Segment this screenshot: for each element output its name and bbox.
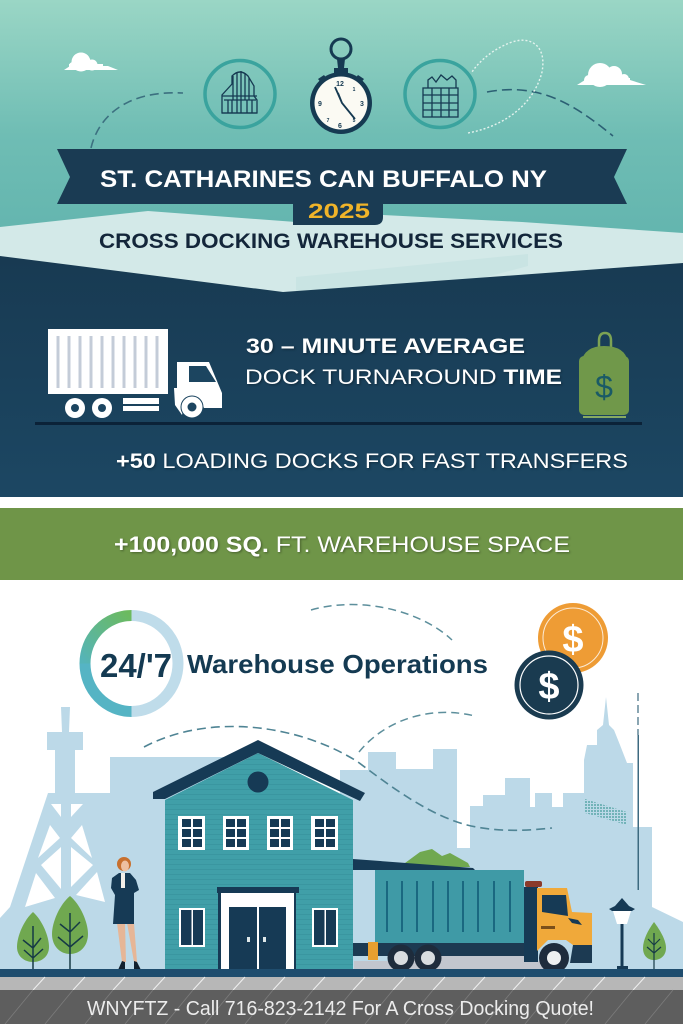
watch numerals: 9 [318, 101, 322, 108]
warehouse building [153, 740, 365, 973]
safety light [368, 942, 378, 960]
pole line [638, 735, 639, 890]
dashed route short [359, 712, 475, 752]
watch numerals: 3 [360, 101, 364, 108]
ribbon banner [57, 149, 627, 204]
roof [153, 740, 365, 801]
tree left large [52, 896, 88, 969]
head and hair [117, 857, 131, 871]
heading: warehouse operations: Warehouse Operations [187, 649, 488, 679]
watch numerals: 6 [338, 123, 342, 130]
dump truck [353, 849, 592, 973]
heading: 24/7: 24/'7 [100, 647, 172, 684]
footer bar [0, 990, 683, 1024]
stopwatch ring [331, 39, 351, 59]
cargo box [375, 870, 524, 943]
icon: warehouse building in ring [205, 60, 275, 128]
crown [334, 59, 348, 73]
wheels [388, 944, 414, 972]
right buildings [340, 697, 683, 970]
green load [405, 849, 470, 867]
entrance door [217, 887, 299, 973]
banner title: ST. CATHARINES CAN BUFFALO NY [100, 166, 547, 193]
upper windows [178, 816, 338, 850]
dashed route right [487, 90, 613, 136]
jacket and skirt [111, 873, 139, 924]
lower windows [179, 908, 338, 947]
round vent [248, 772, 268, 792]
stat: warehouse space: +100,000 SQ. FT. WAREHOUSE SPACE [114, 532, 570, 557]
chassis [353, 943, 533, 956]
icon: green money canister: $ [595, 369, 613, 405]
legs [117, 923, 126, 962]
shoes [118, 961, 141, 970]
skyline [0, 697, 683, 970]
tall pole [637, 693, 639, 735]
panel: header sky [0, 0, 683, 300]
subtitle: CROSS DOCKING WAREHOUSE SERVICES [99, 230, 563, 253]
stat: dock time line 1: 30 – MINUTE AVERAGE [246, 335, 525, 358]
footer call to action: WNYFTZ - Call 716-823-2142 For A Cross Docking Quote! [87, 998, 594, 1020]
icon: store building in ring [405, 60, 475, 128]
tree left small [17, 912, 49, 969]
tree right [643, 922, 666, 969]
watch numerals: 12 [336, 81, 344, 88]
building window grid [585, 799, 627, 825]
icon: green money canister [579, 333, 629, 418]
dashed route long [144, 727, 552, 830]
businesswoman [111, 857, 141, 970]
watch numerals [318, 81, 364, 130]
year tab: 2025 [308, 200, 370, 223]
panel: green stat band [0, 508, 683, 580]
icon: left cloud [64, 52, 118, 72]
icon: navy coin: $ [538, 666, 560, 708]
year tab [293, 200, 383, 225]
watch case [310, 72, 372, 134]
street [0, 969, 683, 990]
watch hands [335, 87, 355, 119]
canopy [353, 859, 475, 870]
dashed route left [91, 93, 183, 148]
icon: stopwatch [310, 39, 372, 134]
icon: white truck [48, 329, 222, 418]
watch numerals: 7 [327, 118, 330, 124]
icon: orange coin: $ [562, 619, 584, 661]
cab back [524, 887, 538, 962]
dashed route upper [311, 605, 452, 640]
stat: loading docks: +50 LOADING DOCKS FOR FAST TRANSFERS [116, 450, 628, 473]
cab [537, 888, 592, 951]
ground line [35, 422, 642, 425]
chart: 24/7 ring [85, 616, 178, 712]
panel: navy stats [0, 256, 683, 497]
icon: orange coin [538, 603, 608, 673]
light hills behind subtitle [0, 211, 683, 300]
dotted loop [468, 40, 543, 133]
street lamp [609, 898, 635, 970]
watch numerals: 1 [353, 87, 356, 93]
stat: dock time line 2: DOCK TURNAROUND TIME [245, 366, 562, 389]
icon: right cloud [577, 63, 646, 87]
radio tower [0, 707, 240, 970]
icon: navy coin [514, 650, 584, 720]
watch numerals: 5 [353, 118, 356, 124]
